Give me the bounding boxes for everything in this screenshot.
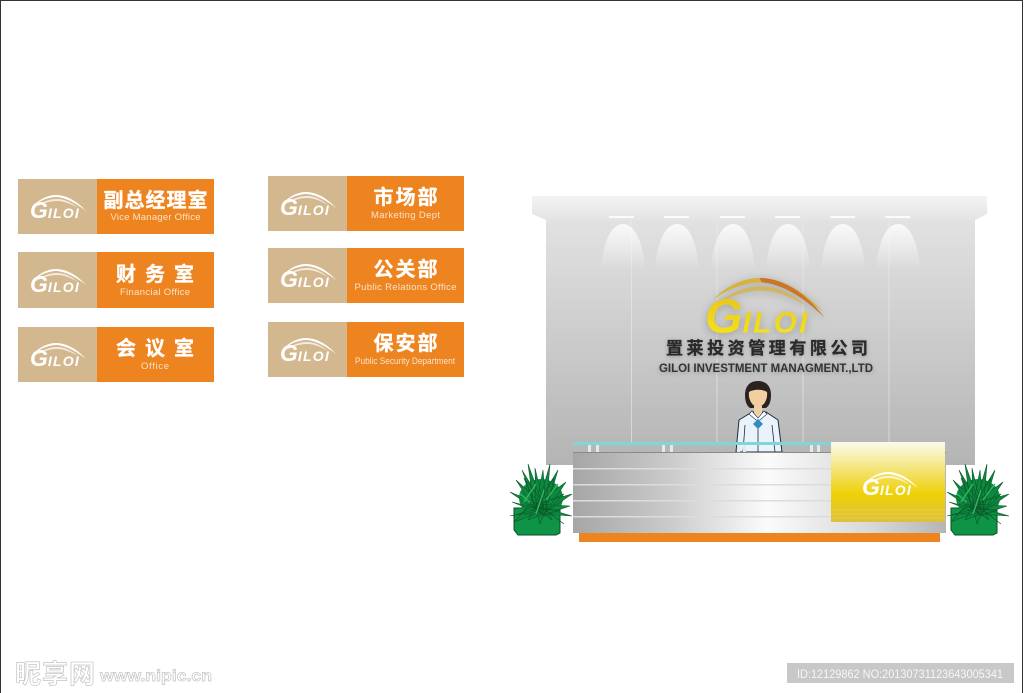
plant: right	[947, 464, 1009, 535]
sign: Office: 会议室	[116, 336, 194, 360]
wall logo: GILOI	[705, 290, 810, 344]
logo: small white: GILOI	[280, 266, 330, 292]
logo: small white: GILOI	[30, 271, 80, 297]
sign: Public Security Department: 保安部	[374, 332, 438, 355]
sign: Office	[18, 327, 214, 382]
receptionist	[736, 381, 782, 452]
sign: Financial Office: 财务室	[116, 262, 194, 286]
sign: Financial Office	[18, 252, 214, 308]
sign: Vice Manager Office: 副总经理室	[104, 188, 208, 212]
sign: Financial Office: Financial Office	[120, 287, 190, 298]
sign: Marketing Dept: Marketing Dept	[371, 210, 440, 221]
logo: small white: GILOI	[280, 194, 330, 220]
image id stamp	[787, 663, 1014, 683]
orange desk base	[579, 533, 940, 542]
company name: Chinese: 置莱投资管理有限公司	[666, 338, 868, 358]
watermark: nipic	[15, 659, 212, 689]
image id stamp: ID:12129862 NO:20130731123643005341	[797, 669, 1003, 681]
plant: left	[510, 464, 572, 535]
sign: Vice Manager Office: Vice Manager Office	[110, 212, 200, 223]
sign: Marketing Dept	[268, 176, 464, 231]
sign: Public Relations Office: Public Relations Office	[354, 282, 456, 293]
logo: small white: GILOI	[30, 345, 80, 371]
watermark: nipic: www.nipic.cn	[99, 668, 212, 685]
sign: Marketing Dept: 市场部	[374, 185, 438, 209]
sign: Public Relations Office: 公关部	[374, 258, 438, 281]
logo: small white: GILOI	[280, 340, 330, 366]
reception wall	[546, 218, 975, 465]
glass counter top	[573, 442, 831, 452]
sign: Public Security Department	[268, 322, 464, 377]
logo: small white: GILOI	[30, 197, 80, 223]
logo: desk panel: GILOI	[862, 474, 912, 500]
sign: Vice Manager Office	[18, 179, 214, 234]
sign: Public Security Department: Public Security Department	[355, 356, 455, 367]
watermark: nipic: 昵享网	[15, 659, 95, 689]
company name: English: GILOI INVESTMENT MANAGMENT.,LTD	[659, 361, 873, 375]
sign: Public Relations Office	[268, 248, 464, 303]
sign: Office: Office	[141, 361, 169, 372]
yellow desk panel	[831, 442, 945, 522]
light cones	[601, 224, 920, 270]
ceiling bulkhead	[532, 196, 987, 220]
reception desk	[573, 452, 946, 533]
